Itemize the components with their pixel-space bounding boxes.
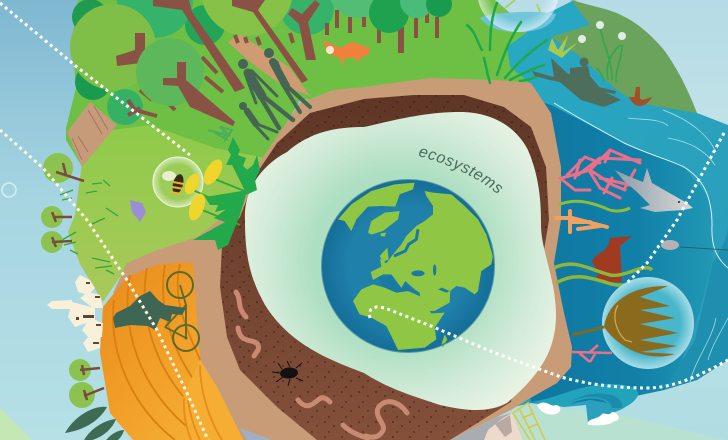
fish — [661, 240, 728, 250]
bee bubble — [153, 157, 203, 207]
duck — [629, 87, 652, 106]
soil mite — [272, 361, 303, 386]
dolphin eye — [678, 201, 680, 203]
wetland plants — [548, 21, 626, 82]
worms — [236, 292, 407, 438]
pink coral — [560, 150, 640, 198]
small air bubble — [2, 183, 16, 197]
kayaker — [532, 58, 621, 107]
water body — [495, 0, 728, 423]
fox — [323, 40, 370, 66]
continents — [338, 183, 493, 350]
butterfly — [130, 200, 146, 222]
kelp bubble — [572, 277, 694, 369]
tan patch under people — [228, 34, 310, 96]
reeds — [467, 3, 547, 83]
brown turtle — [592, 236, 632, 282]
lime meadow — [68, 125, 265, 302]
cyclist — [113, 272, 199, 351]
trunks — [116, 0, 320, 92]
orange field — [100, 262, 243, 440]
ground layer — [113, 78, 572, 440]
foam — [537, 402, 619, 425]
lower pink coral — [572, 345, 612, 362]
seaweed ribbons — [554, 264, 652, 285]
cypress trees — [65, 407, 124, 440]
road and buildings — [450, 413, 523, 440]
white town — [47, 275, 103, 352]
pale green corner — [0, 408, 32, 440]
small trees — [41, 153, 104, 408]
globe — [322, 180, 494, 352]
dolphin — [615, 168, 693, 212]
soil layer — [220, 95, 549, 440]
ecosystems label: ecosystems — [419, 148, 502, 193]
orange coral — [556, 211, 607, 232]
green seaweed — [558, 201, 630, 211]
grass ticks — [60, 180, 118, 274]
pylon — [513, 403, 545, 440]
green hill — [551, 0, 697, 113]
woman — [264, 48, 310, 112]
top water bubble — [477, 0, 559, 32]
man — [238, 59, 293, 128]
ecosystems inner zone — [245, 112, 556, 410]
grey ground wedge — [240, 428, 272, 440]
cliff — [67, 102, 117, 167]
tree canopy — [70, 0, 452, 126]
upper meadow — [66, 0, 531, 170]
child — [239, 102, 277, 139]
people silhouettes — [238, 48, 310, 139]
dandelion — [182, 137, 260, 250]
grass tuft — [208, 126, 232, 140]
